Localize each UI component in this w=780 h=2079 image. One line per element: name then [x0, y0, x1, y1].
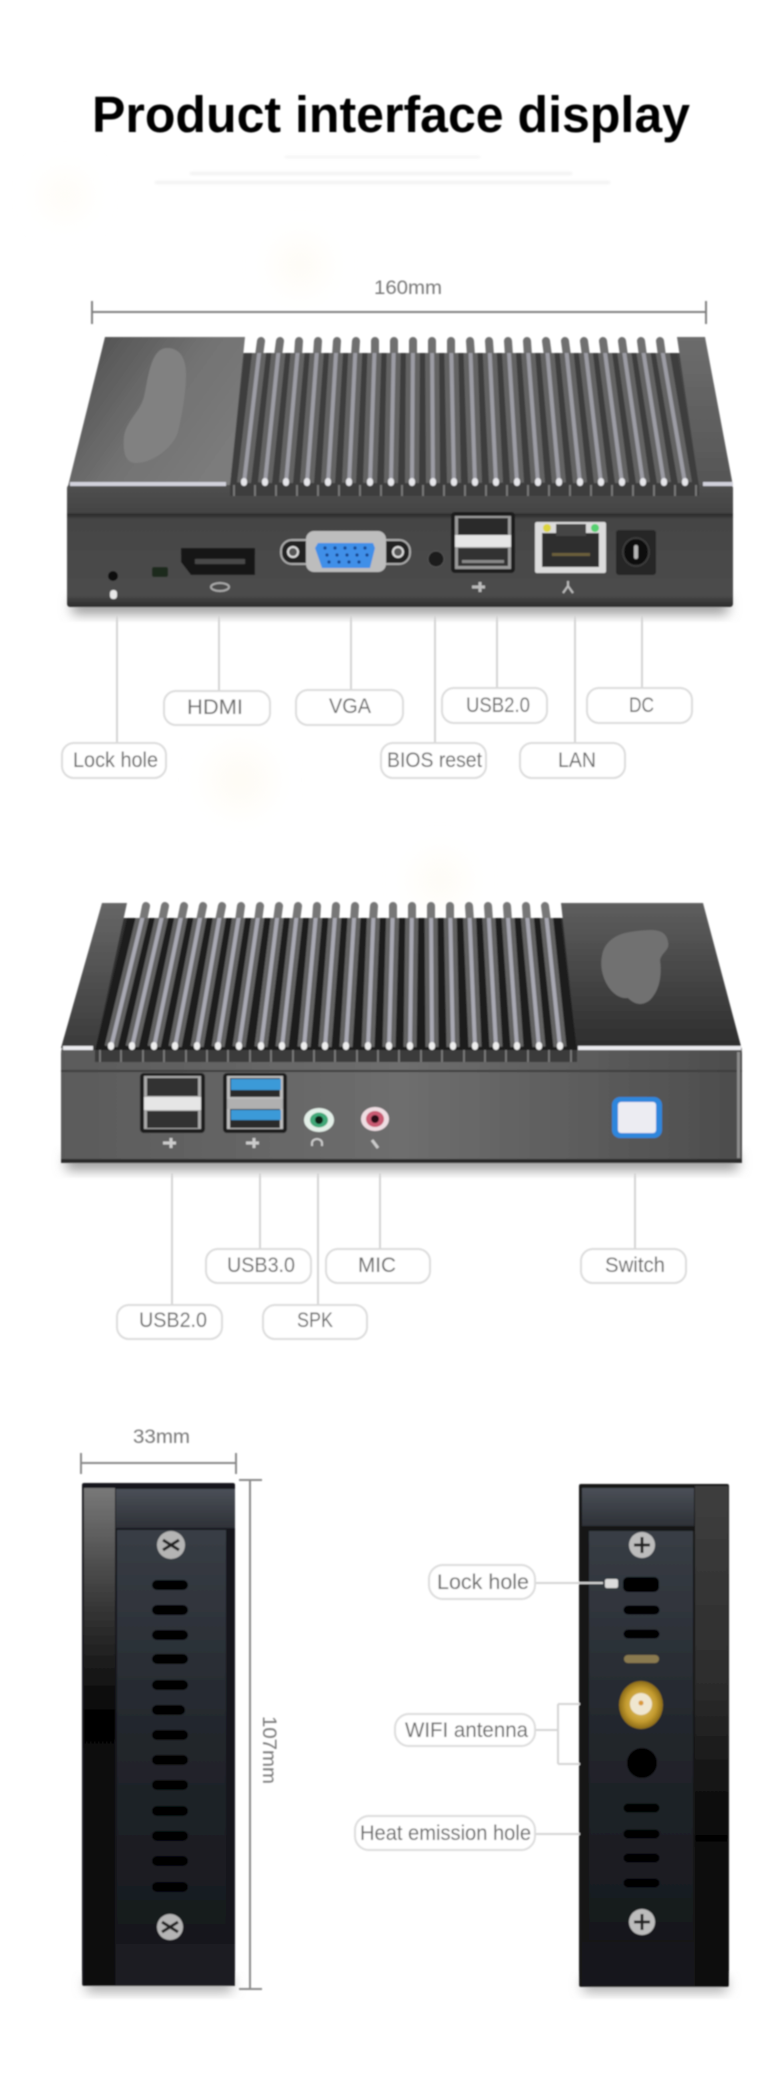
dimension: 160mm	[92, 278, 706, 324]
device 2: front view	[61, 903, 742, 1170]
label: Switch	[581, 1249, 686, 1283]
label: BIOS reset	[381, 743, 486, 778]
label: VGA	[296, 690, 403, 725]
device 1 heat-sink fins	[230, 337, 699, 486]
label: USB2.0	[117, 1305, 222, 1339]
callout lines: device 1	[117, 615, 642, 743]
screws	[157, 1531, 185, 1940]
lock hole port	[108, 571, 118, 599]
lock icon	[605, 1579, 618, 1588]
side strip	[84, 1488, 115, 1986]
label: Switch: Switch	[605, 1254, 665, 1277]
background watermark	[43, 173, 466, 906]
label: WIFI antenna: WIFI antenna	[405, 1719, 528, 1742]
device 2 heat-sink fins	[95, 903, 577, 1051]
vent slots	[157, 1585, 183, 1887]
vent plate	[589, 1531, 693, 1940]
DC port	[616, 530, 656, 575]
label: Lock hole	[429, 1565, 535, 1599]
lower panel	[116, 1944, 235, 1986]
label: SPK	[263, 1305, 367, 1339]
label: MIC	[326, 1249, 430, 1283]
dimension: 107mm: 107mm	[258, 1716, 279, 1784]
device 2 front panel	[61, 1050, 742, 1163]
label: USB2.0: USB2.0	[139, 1309, 207, 1332]
device 1 top: logo blur	[124, 348, 186, 463]
dimension: 33mm	[81, 1427, 236, 1474]
callout lines: device 2	[172, 1173, 635, 1305]
label: BIOS reset: BIOS reset	[387, 749, 482, 772]
side strip	[695, 1486, 728, 1986]
label: DC: DC	[629, 694, 654, 717]
title: Product interface display	[92, 86, 691, 143]
HDMI port	[181, 548, 255, 591]
dimension: 33mm: 33mm	[133, 1427, 190, 1448]
label: USB2.0: USB2.0	[466, 694, 530, 717]
lower panel	[582, 1942, 694, 1986]
device 1 top: left solid panel	[68, 337, 245, 486]
device 3: left side view	[82, 1483, 235, 1992]
vent slots	[628, 1610, 655, 1883]
label: DC	[587, 688, 692, 723]
power switch	[612, 1097, 662, 1138]
dimension: 160mm: 160mm	[374, 278, 442, 299]
LED	[152, 567, 168, 577]
vent plate	[117, 1530, 226, 1942]
callout lines: device 4	[535, 1583, 603, 1834]
label: Lock hole: Lock hole	[73, 749, 158, 772]
second antenna hole	[627, 1748, 657, 1778]
VGA port	[281, 531, 410, 572]
SPK jack	[304, 1108, 334, 1146]
gold slot	[624, 1655, 659, 1663]
label: Lock hole	[62, 743, 166, 778]
USB2.0 port	[451, 512, 515, 592]
WIFI antenna connector	[619, 1681, 663, 1729]
label: MIC: MIC	[358, 1254, 396, 1277]
faint subtitle bars	[155, 156, 610, 184]
screws	[629, 1532, 655, 1935]
upper panel	[582, 1488, 694, 1526]
device 1 front panel	[67, 485, 733, 607]
USB3.0 port	[223, 1073, 287, 1148]
label: VGA: VGA	[329, 695, 371, 718]
MIC jack	[361, 1107, 389, 1148]
label: Lock hole: Lock hole	[437, 1571, 529, 1594]
label: WIFI antenna	[395, 1714, 535, 1746]
label: Heat emission hole	[355, 1816, 535, 1850]
label: SPK: SPK	[297, 1309, 333, 1332]
label: HDMI: HDMI	[187, 696, 243, 719]
device 2 top: logo blur	[601, 930, 668, 1004]
device 4: right side view	[579, 1484, 729, 1992]
lock slot	[623, 1577, 659, 1592]
label: USB2.0	[442, 688, 547, 723]
device 1: rear view	[67, 337, 733, 614]
label: USB3.0	[206, 1249, 311, 1283]
label: USB3.0: USB3.0	[227, 1254, 295, 1277]
label: LAN: LAN	[558, 749, 596, 772]
USB2.0 port	[140, 1073, 205, 1148]
dimension: 107mm	[239, 1480, 279, 1989]
LAN port	[535, 522, 606, 593]
device 2 top: right solid panel	[561, 903, 742, 1050]
upper panel	[116, 1489, 235, 1528]
BIOS reset hole	[428, 551, 444, 567]
label: LAN	[520, 743, 625, 778]
device 2 top: left edge	[61, 903, 127, 1050]
label: HDMI	[164, 691, 270, 725]
label: Heat emission hole: Heat emission hole	[360, 1822, 531, 1845]
device 1 top: right solid panel	[677, 337, 733, 486]
